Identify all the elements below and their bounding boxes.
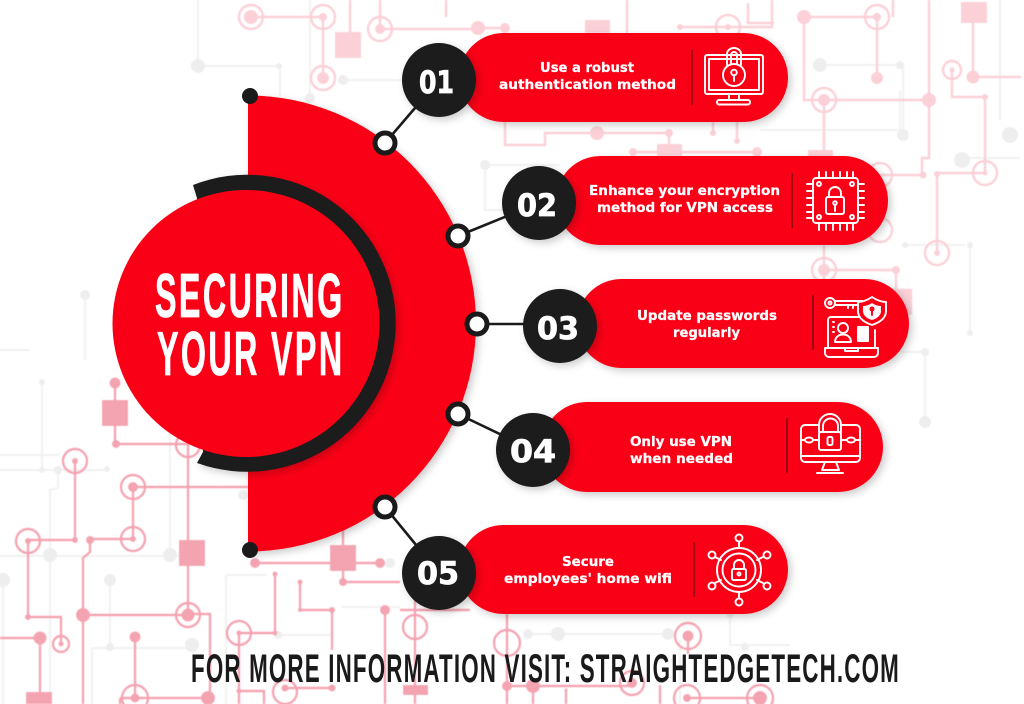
step 04 text: Only use VPN	[630, 435, 732, 450]
panel: step 02	[502, 156, 888, 245]
step 01 number badge	[402, 43, 476, 117]
black arc	[193, 175, 396, 472]
step 01 text: Use a robust	[540, 61, 634, 76]
step 02 text: method for VPN access	[597, 201, 773, 216]
step 04 text: when needed	[630, 452, 733, 467]
footer call to action: FOR MORE INFORMATION VISIT: STRAIGHTEDGETECH.COM	[191, 646, 899, 691]
icon: chip with padlock	[807, 172, 864, 230]
step 02 number badge: 02	[517, 188, 557, 224]
connector lines	[385, 80, 560, 573]
red half-disc	[248, 96, 476, 552]
step 03 text	[637, 309, 777, 341]
step 03 number badge	[523, 289, 597, 363]
step 03 text: regularly	[673, 326, 741, 341]
step 05 number badge: 05	[417, 556, 459, 592]
panel: step 05	[402, 525, 788, 614]
red title circle	[112, 190, 380, 457]
step 04 number badge: 04	[510, 434, 556, 470]
step 03 text: Update passwords	[637, 309, 777, 324]
step 04 number badge	[496, 413, 570, 487]
title: YOUR VPN	[157, 320, 342, 389]
panel: step 04	[496, 402, 883, 492]
panel: step 03	[523, 279, 909, 368]
step 05 number badge	[402, 536, 476, 610]
title	[155, 262, 342, 389]
icon: network with padlock	[708, 534, 770, 606]
title: SECURING	[155, 262, 342, 331]
icon: monitor with chained padlock	[801, 414, 860, 473]
icon: monitor with padlock	[705, 48, 763, 104]
sector end dots	[242, 88, 258, 558]
step 04 text	[630, 435, 733, 467]
hub: half-circle sector with central title	[112, 88, 476, 558]
step 03 number badge: 03	[537, 311, 579, 347]
step 02 text: Enhance your encryption	[589, 184, 780, 199]
step 05 text: employees' home wifi	[504, 572, 672, 587]
step 02 text	[589, 184, 780, 216]
step 01 number badge: 01	[419, 65, 454, 101]
step 02 number badge	[502, 166, 576, 240]
step 01 text	[499, 61, 676, 93]
step 01 text: authentication method	[499, 78, 676, 93]
connector nodes	[375, 133, 487, 517]
icon: key, shield and laptop	[825, 297, 886, 357]
step 05 text	[504, 555, 672, 587]
panel: step 01	[402, 33, 788, 122]
step 05 text: Secure	[562, 555, 614, 570]
